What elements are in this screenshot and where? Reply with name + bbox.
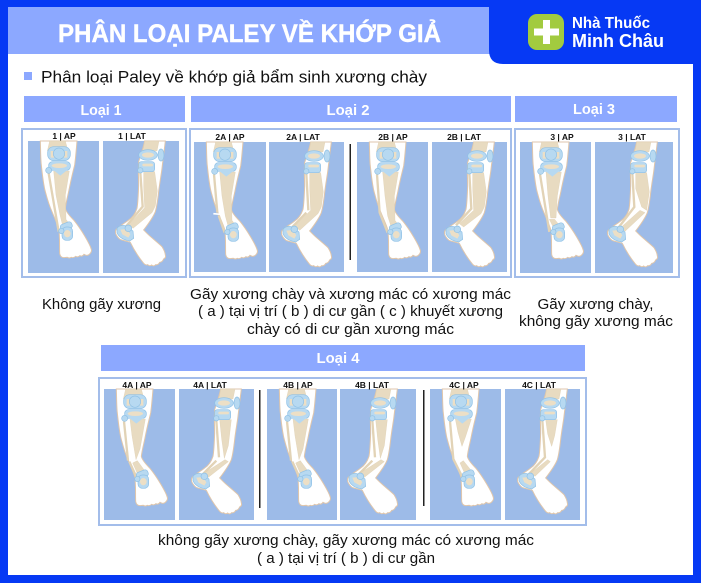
divider line bbox=[259, 390, 260, 508]
diagram: 3 AP bbox=[520, 132, 591, 273]
diagram: 4B AP: 4B | AP bbox=[283, 380, 313, 390]
diagram: 4C AP bbox=[430, 380, 501, 520]
diagram: 3 LAT bbox=[595, 132, 673, 273]
caption: Loại 2: chày có di cư gần xương mác bbox=[247, 321, 455, 338]
diagram: 4B LAT: 4B | LAT bbox=[355, 380, 390, 390]
divider line bbox=[350, 144, 351, 260]
heading: Loại 2: Loại 2 bbox=[326, 103, 370, 119]
diagram: 4B LAT bbox=[340, 380, 416, 520]
icon: green plus bbox=[528, 14, 564, 50]
diagram: 4C LAT: 4C | LAT bbox=[522, 380, 557, 390]
diagram: 4A LAT: 4A | LAT bbox=[193, 380, 228, 390]
panel: Loại 4 diagrams bbox=[99, 378, 586, 525]
logo name: Nhà Thuốc bbox=[572, 15, 650, 32]
diagram: 2B AP: 2B | AP bbox=[378, 132, 408, 142]
heading: Loại 4: Loại 4 bbox=[316, 351, 360, 367]
diagram: 1 LAT: 1 | LAT bbox=[118, 131, 147, 141]
caption: Loại 2: Gãy xương chày và xương mác có xương mác bbox=[190, 286, 511, 303]
caption: Loại 4: ( a ) tại vị trí ( b ) di cư gần bbox=[257, 550, 435, 567]
diagram: 4A LAT bbox=[179, 380, 254, 520]
heading: Loại 4 bbox=[101, 345, 585, 371]
divider line bbox=[423, 390, 424, 506]
caption: Loại 3: Gãy xương chày, bbox=[538, 296, 654, 313]
caption: Loại 3: không gãy xương mác bbox=[519, 313, 674, 330]
diagram: 1 AP: 1 | AP bbox=[52, 131, 76, 141]
diagram: 2A AP: 2A | AP bbox=[215, 132, 245, 142]
diagram: 3 LAT: 3 | LAT bbox=[618, 132, 647, 142]
diagram: 4C AP: 4C | AP bbox=[449, 380, 479, 390]
heading: Loại 2 bbox=[191, 96, 511, 122]
diagram: 1 LAT bbox=[103, 131, 179, 273]
diagram: 3 AP: 3 | AP bbox=[550, 132, 574, 142]
logo block bbox=[489, 0, 701, 64]
diagram: 4A AP bbox=[104, 380, 175, 520]
diagram: 4A AP: 4A | AP bbox=[122, 380, 152, 390]
caption: Loại 2: ( a ) tại vị trí ( b ) di cư gần ( c ) khuyết xương bbox=[198, 303, 503, 320]
diagram: 2A AP bbox=[194, 132, 266, 272]
panel: Loại 1 diagrams bbox=[22, 129, 186, 277]
heading: Loại 3: Loại 3 bbox=[573, 102, 615, 118]
caption: Loại 1: Không gãy xương bbox=[42, 296, 161, 313]
heading: Loại 3 bbox=[515, 96, 677, 122]
diagram: 2B LAT bbox=[432, 132, 507, 272]
diagram: 2B LAT: 2B | LAT bbox=[447, 132, 482, 142]
diagram: 1 AP bbox=[28, 131, 99, 273]
panel: Loại 3 diagrams bbox=[515, 129, 679, 277]
title banner bbox=[8, 7, 490, 54]
diagram: 4C LAT bbox=[505, 380, 580, 520]
heading: Loại 1: Loại 1 bbox=[80, 103, 122, 119]
subtitle with bullet: Phân loại Paley về khớp giả bẩm sinh xương chày bbox=[41, 68, 428, 86]
logo name: Minh Châu bbox=[572, 31, 664, 51]
diagram: 4B AP bbox=[267, 380, 337, 520]
diagram: 2B AP bbox=[357, 132, 428, 272]
caption: Loại 4: không gãy xương chày, gãy xương mác có xương mác bbox=[158, 532, 534, 549]
title banner: PHÂN LOẠI PALEY VỀ KHỚP GIẢ bbox=[58, 18, 441, 48]
heading: Loại 1 bbox=[24, 96, 185, 122]
panel: Loại 2 diagrams bbox=[190, 129, 511, 277]
diagram: 2A LAT: 2A | LAT bbox=[286, 132, 321, 142]
diagram: 2A LAT bbox=[269, 132, 344, 272]
